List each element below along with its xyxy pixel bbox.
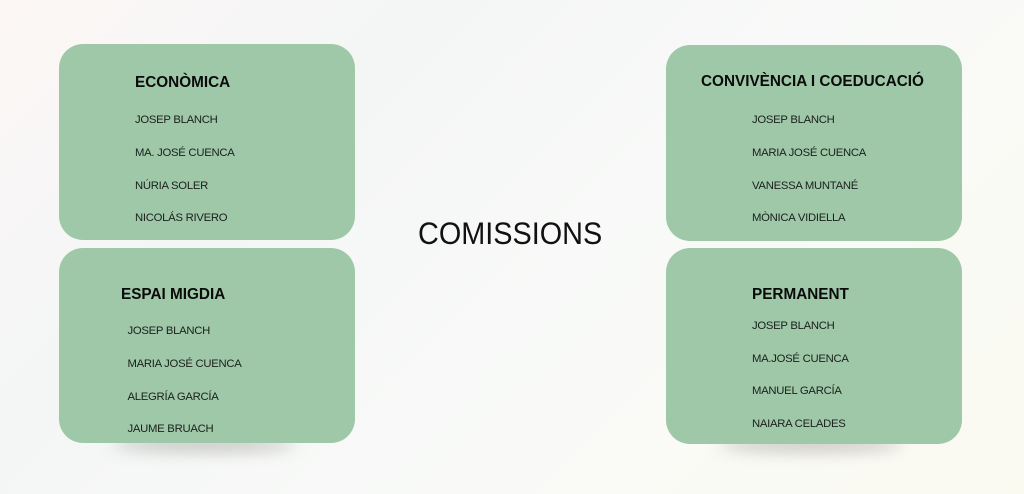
member: Jaume Bruach: JAUME BRUACH	[128, 423, 213, 435]
member: Manuel García: MANUEL GARCÍA	[752, 385, 842, 397]
member: Mònica Vidiella: MÒNICA VIDIELLA	[752, 212, 845, 224]
panel: econòmica	[59, 44, 355, 240]
shadow under permanent panel	[719, 437, 903, 451]
shadow under espai migdia panel	[112, 437, 296, 451]
member: Ma. José Cuenca: MA. JOSÉ CUENCA	[135, 147, 235, 159]
heading: espai migdia: ESPAI MIGDIA	[121, 286, 225, 303]
heading: convivència i coeducació: CONVIVÈNCIA I COEDUCACIÓ	[701, 73, 924, 90]
panel: permanent	[666, 248, 962, 444]
title: COMISSIONS	[418, 215, 602, 251]
panel: espai migdia	[59, 248, 355, 443]
member: Josep Blanch: JOSEP BLANCH	[752, 320, 835, 332]
member: Naiara Celades: NAIARA CELADES	[752, 418, 846, 430]
member: Vanessa Muntané: VANESSA MUNTANÉ	[752, 180, 858, 192]
heading: econòmica: ECONÒMICA	[135, 74, 230, 91]
member: Maria José Cuenca: MARIA JOSÉ CUENCA	[128, 358, 242, 370]
member: Josep Blanch: JOSEP BLANCH	[128, 325, 210, 337]
panel: convivència i coeducació	[666, 45, 962, 241]
member: Josep Blanch: JOSEP BLANCH	[135, 114, 218, 126]
member: Josep Blanch: JOSEP BLANCH	[752, 114, 835, 126]
member: Maria José Cuenca: MARIA JOSÉ CUENCA	[752, 147, 866, 159]
member: Ma.José Cuenca: MA.JOSÉ CUENCA	[752, 353, 849, 365]
member: Alegría García: ALEGRÍA GARCÍA	[128, 391, 219, 403]
heading: permanent: PERMANENT	[752, 286, 849, 303]
member: Núria Soler: NÚRIA SOLER	[135, 180, 208, 192]
member: Nicolás Rivero: NICOLÁS RIVERO	[135, 212, 227, 224]
